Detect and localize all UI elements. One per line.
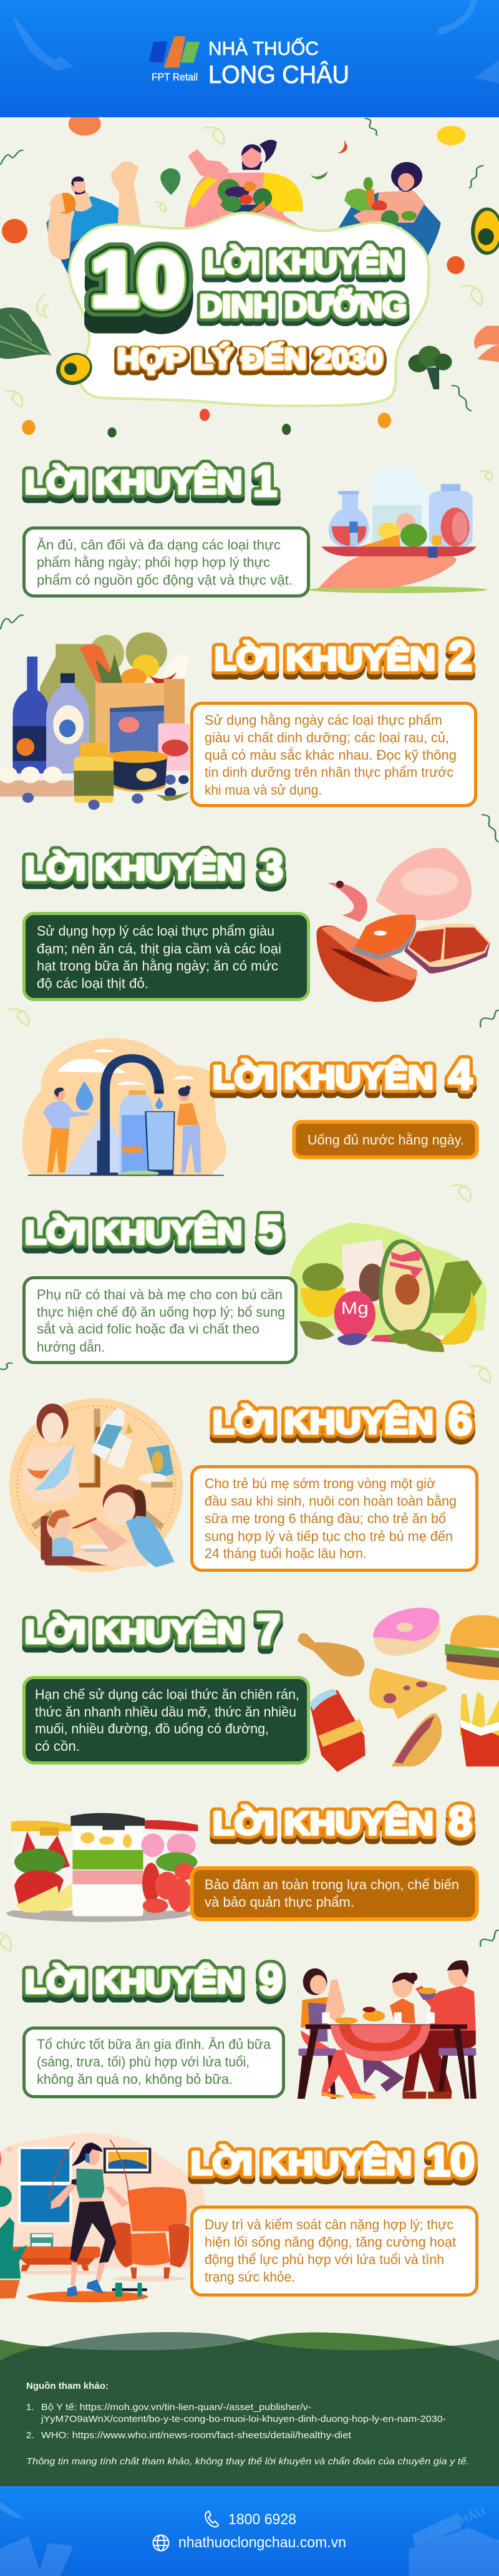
title number 10: 10 [91,254,185,339]
heading: Lời khuyên 2: LỜI KHUYÊN [215,641,435,677]
heading: Lời khuyên 2: LỜI KHUYÊN [215,641,435,677]
heading: Lời khuyên 4: LỜI KHUYÊN [213,1064,434,1101]
heading: Lời khuyên 9: LỜI KHUYÊN [25,1968,242,2005]
website: nhathuoclongchau.com.vn [178,2534,346,2551]
heading: Lời khuyên 3: LỜI KHUYÊN [25,855,242,892]
heading: Lời khuyên 4: 4 [448,1051,472,1098]
reference 2: WHO: https://www.who.int/news-room/fact-sheets/detail/healthy-diet [41,2430,352,2441]
heading: Lời khuyên 10: 10 [426,2138,475,2185]
heading: Lời khuyên 6: LỜI KHUYÊN [213,1404,434,1441]
heading: Lời khuyên 9 [25,1956,283,2008]
illustration: three people holding food [46,140,441,278]
heading: Lời khuyên 7: LỜI KHUYÊN [25,1614,242,1650]
heading: Lời khuyên 8: 8 [448,1803,472,1850]
heading: Lời khuyên 3: 3 [259,843,283,891]
title line: Hợp lý đến 2030: HỢP LÝ ĐẾN 2030 [117,344,383,377]
text box 6: đầu sau khi sinh, nuôi con hoàn toàn bằng [205,1493,457,1509]
text box 2: quả có màu sắc khác nhau. Đọc kỹ thông [205,747,457,763]
text box 5: sắt và acid folic hoặc đa vi chất theo [37,1321,259,1337]
title line: Lời khuyên: LỜI KHUYÊN [205,249,402,284]
text box 7: Hạn chế sử dụng các loại thức ăn chiên rán, [35,1687,299,1702]
heading: Lời khuyên 4: LỜI KHUYÊN [213,1059,434,1096]
heading: Lời khuyên 2 [215,632,472,685]
text box 3: Sử dụng hợp lý các loại thực phẩm giàu [37,923,274,939]
heading: Lời khuyên 4 [213,1051,472,1103]
icon: globe [153,2535,168,2551]
illustration: meal prep jars [6,1813,198,1922]
heading: Lời khuyên 1 [25,458,277,510]
heading: Lời khuyên 10: LỜI KHUYÊN [191,2145,412,2182]
text box 2: Sử dụng hằng ngày các loại thực phẩm [205,712,442,728]
title line: Dinh dưỡng: DINH DƯỠNG [200,288,407,324]
heading: Lời khuyên 3: 3 [259,848,283,896]
text box 6: 24 tháng tuổi hoặc lâu hơn. [205,1546,367,1561]
disclaimer: Thông tin mang tính chất tham khảo, không thay thế lời khuyên và chẩn đoán của chuyên gia y tế. [26,2456,469,2467]
text box 3: độ các loại thịt đỏ. [37,976,148,991]
footer blue band [0,2486,499,2576]
reference 1: Bộ Y tế: https://moh.gov.vn/tin-lien-quan/-/asset_publisher/v- [41,2402,311,2413]
reference 1: 1. [26,2402,34,2413]
heading: Lời khuyên 8: LỜI KHUYÊN [213,1805,434,1842]
decorative food and squiggles around title [0,112,499,437]
heading: Lời khuyên 9: LỜI KHUYÊN [25,1963,242,2000]
title number 10: 10 [91,237,185,322]
heading: Lời khuyên 1: LỜI KHUYÊN [25,469,242,506]
text box 8 [192,1868,477,1919]
reference 1 [26,2402,446,2424]
heading: Lời khuyên 4: LỜI KHUYÊN [213,1059,434,1096]
heading: Lời khuyên 1: 1 [253,458,277,505]
heading: Lời khuyên 3 [25,843,283,896]
text box 10 [192,2207,477,2295]
phone number: 1800 6928 [228,2511,296,2528]
illustration: family meal [298,1960,477,2099]
title line: Dinh dưỡng: DINH DƯỠNG [200,288,407,324]
brand name line 1: NHÀ THUỐC [208,37,319,59]
text box 10: hiện lối sống năng động, tăng cường hoạt [205,2234,456,2250]
text box 10: động thể lực phù hợp với lứa tuổi và tình [205,2252,444,2267]
heading: Lời khuyên 8: LỜI KHUYÊN [213,1805,434,1842]
title line: Lời khuyên: LỜI KHUYÊN [205,245,402,280]
illustration: fast food [298,1608,499,1772]
heading: Lời khuyên 4: 4 [448,1051,472,1098]
text box 1: phẩm có nguồn gốc động vật và thực vật. [37,573,293,588]
title line: Lời khuyên: LỜI KHUYÊN [205,245,402,280]
heading: Lời khuyên 1: LỜI KHUYÊN [25,464,242,501]
illustration: hand holding plate of food [309,465,487,593]
heading: Lời khuyên 4: LỜI KHUYÊN [213,1059,434,1096]
title number 10: 10 [91,237,185,322]
reference 2: 2. [26,2430,34,2441]
title number 10: 10 [91,237,185,322]
heading: Lời khuyên 5: 5 [258,1207,282,1254]
heading: Lời khuyên 3: LỜI KHUYÊN [25,850,242,887]
heading: Lời khuyên 3: LỜI KHUYÊN [25,850,242,887]
text box 5: hướng dẫn. [37,1339,105,1355]
watermark storefront: LONG CHÂU [412,2505,488,2545]
heading: Lời khuyên 8: 8 [448,1798,472,1845]
text box 10: trạng sức khỏe. [205,2269,295,2285]
heading: Lời khuyên 5: 5 [258,1212,282,1259]
illustration: breastfeeding and feeding baby [9,1398,183,1572]
heading: Lời khuyên 9: 9 [259,1956,283,2003]
heading: Lời khuyên 8: 8 [448,1798,472,1845]
squiggles [9,1009,499,1202]
heading: Lời khuyên 10: 10 [426,2143,475,2190]
heading: Lời khuyên 2: LỜI KHUYÊN [215,641,435,677]
heading: Lời khuyên 9: 9 [259,1956,283,2003]
heading: Lời khuyên 10: 10 [426,2138,475,2185]
heading: Lời khuyên 5: LỜI KHUYÊN [25,1214,242,1251]
text box 7 [24,1678,308,1763]
heading: Lời khuyên 6: LỜI KHUYÊN [213,1404,434,1441]
heading: Lời khuyên 7 [25,1606,280,1658]
footer green section [0,2332,499,2486]
heading: Lời khuyên 3: 3 [259,843,283,891]
text box 10: Duy trì và kiểm soát cân nặng hợp lý; thực [205,2217,453,2232]
heading: Lời khuyên 2: LỜI KHUYÊN [215,646,435,682]
illustration: water faucet [22,1038,226,1176]
text box 7: muối, nhiều đường, đồ uống có đường, [35,1721,269,1736]
text box 5: Phụ nữ có thai và bà mẹ cho con bú cần [37,1287,283,1302]
heading: Lời khuyên 7: LỜI KHUYÊN [25,1614,242,1650]
logo text: FPT Retail: FPT Retail [152,71,198,83]
text box 3: hạt trong bữa ăn hằng ngày; ăn có mức [37,958,278,974]
text box 8: và bảo quản thực phẩm. [205,1894,354,1910]
title line: Dinh dưỡng: DINH DƯỠNG [200,288,407,324]
heading: Lời khuyên 4: 4 [448,1056,472,1103]
title line: Dinh dưỡng: DINH DƯỠNG [200,293,407,328]
woman with vegetables [337,162,441,260]
heading: Lời khuyên 10: 10 [426,2138,475,2185]
text box 6: sung hợp lý và tiếp tục cho trẻ bú mẹ đến [205,1528,453,1544]
text box 2: khi mua và sử dụng. [205,782,322,798]
heading: Lời khuyên 10: LỜI KHUYÊN [191,2150,412,2187]
text box 9: Tổ chức tốt bữa ăn gia đình. Ăn đủ bữa [37,2036,271,2052]
magnesium label: Mg [341,1299,369,1318]
text box 2: giàu vi chất dinh dưỡng; các loại rau, củ, [205,730,449,745]
title [91,237,407,377]
heading: Lời khuyên 1: 1 [253,458,277,505]
logo: FPT Retail mark [149,36,200,67]
illustration: protein foods [317,848,490,1002]
title line: Hợp lý đến 2030: HỢP LÝ ĐẾN 2030 [117,342,383,375]
heading: Lời khuyên 7: 7 [256,1606,280,1654]
watermark storefront [0,2501,499,2576]
heading: Lời khuyên 9: LỜI KHUYÊN [25,1963,242,2000]
heading: Lời khuyên 2: 2 [448,632,472,680]
heading: Lời khuyên 5: LỜI KHUYÊN [25,1219,242,1256]
man with orange [46,162,141,278]
text box 5: thực hiện chế độ ăn uống hợp lý; bổ sung [37,1304,285,1320]
text box 2 [192,704,475,806]
text box 9: (sáng, trưa, tối) phù hợp với lứa tuổi, [37,2054,250,2070]
heading: Lời khuyên 5: 5 [258,1207,282,1254]
heading: Lời khuyên 6: LỜI KHUYÊN [213,1409,434,1446]
heading: Lời khuyên 1: LỜI KHUYÊN [25,464,242,501]
heading: Lời khuyên 6: 6 [448,1397,472,1444]
text box 9: không ăn quá no, không bỏ bữa. [37,2071,233,2087]
heading: Lời khuyên 1: 1 [253,463,277,510]
heading: Lời khuyên 6: LỜI KHUYÊN [213,1404,434,1441]
heading: Lời khuyên 5: LỜI KHUYÊN [25,1214,242,1251]
squiggles [1,471,498,842]
title blob [69,213,429,406]
text box 9 [24,2028,283,2097]
squiggles [0,1930,498,1951]
references heading: Nguồn tham khảo: [26,2381,109,2391]
heading: Lời khuyên 7: 7 [256,1611,280,1658]
heading: Lời khuyên 2: 2 [448,637,472,685]
heading: Lời khuyên 1: 1 [253,458,277,505]
heading: Lời khuyên 5: 5 [258,1207,282,1254]
text box 7: có cồn. [35,1738,80,1754]
heading: Lời khuyên 8 [213,1798,472,1850]
text box 1: phẩm hằng ngày; phối hợp hợp lý thực [37,554,270,570]
heading: Lời khuyên 3: 3 [259,843,283,891]
heading: Lời khuyên 6: 6 [448,1397,472,1444]
heading: Lời khuyên 2: 2 [448,632,472,680]
heading: Lời khuyên 8: LỜI KHUYÊN [213,1810,434,1847]
heading: Lời khuyên 7: LỜI KHUYÊN [25,1614,242,1650]
text box 4: Uống đủ nước hằng ngày. [308,1132,464,1148]
heading: Lời khuyên 6: 6 [448,1402,472,1449]
title number 10: 10 [91,237,185,322]
text box 6: sữa mẹ trong 6 tháng đầu; cho trẻ ăn bổ [205,1511,446,1526]
heading: Lời khuyên 1: LỜI KHUYÊN [25,464,242,501]
heading: Lời khuyên 9: 9 [259,1956,283,2003]
text box 1: Ăn đủ, cân đối và đa dạng các loại thực [37,537,281,553]
heading: Lời khuyên 8: 8 [448,1798,472,1845]
heading: Lời khuyên 5 [25,1207,282,1259]
icon: phone [205,2511,218,2527]
illustration: woman jumping rope in living room [0,2133,205,2302]
text box 8: Bảo đảm an toàn trong lựa chọn, chế biến [205,1877,459,1892]
brand name line 2: LONG CHÂU [208,61,349,89]
heading: Lời khuyên 10: LỜI KHUYÊN [191,2145,412,2182]
heading: Lời khuyên 4: 4 [448,1051,472,1098]
text box 4 [294,1121,477,1158]
illustration: groceries [0,632,190,810]
heading: Lời khuyên 5: LỜI KHUYÊN [25,1214,242,1251]
heading: Lời khuyên 3: LỜI KHUYÊN [25,850,242,887]
reference 1: jYyM7O9aWnX/content/bo-y-te-cong-bo-muoi-loi-khuyen-dinh-duong-hop-ly-en-nam-2030- [41,2414,446,2424]
illustration: avocado superfood [289,1223,487,1352]
header band [0,0,499,117]
heading: Lời khuyên 10 [191,2138,475,2190]
text box 2: tin dinh dưỡng trên nhãn thực phẩm trước [205,765,453,780]
heading: Lời khuyên 2: 2 [448,632,472,680]
squiggles [1,1363,490,1383]
text box 3: đạm; nên ăn cá, thịt gia cầm và các loại [37,941,281,957]
heading: Lời khuyên 10: LỜI KHUYÊN [191,2145,412,2182]
heading: Lời khuyên 6: 6 [448,1397,472,1444]
heading: Lời khuyên 7: 7 [256,1606,280,1654]
text box 6 [192,1467,477,1571]
title line: Lời khuyên: LỜI KHUYÊN [205,245,402,280]
text box 6: Cho trẻ bú mẹ sớm trong vòng một giờ [205,1476,435,1491]
text box 5 [24,1277,296,1362]
heading: Lời khuyên 8: LỜI KHUYÊN [213,1805,434,1842]
heading: Lời khuyên 9: LỜI KHUYÊN [25,1963,242,2000]
text box 1 [24,528,308,596]
heading: Lời khuyên 7: LỜI KHUYÊN [25,1619,242,1655]
heading: Lời khuyên 9: 9 [259,1961,283,2008]
heading: Lời khuyên 6 [213,1397,472,1449]
title line: Hợp lý đến 2030: HỢP LÝ ĐẾN 2030 [117,342,383,375]
heading: Lời khuyên 7: 7 [256,1606,280,1654]
text box 3 [24,913,308,999]
text box 7: thức ăn nhanh nhiều dầu mỡ, thức ăn nhiều [35,1704,296,1720]
avocado overlapping title [49,346,100,391]
woman with vegetable bowl [185,140,303,228]
